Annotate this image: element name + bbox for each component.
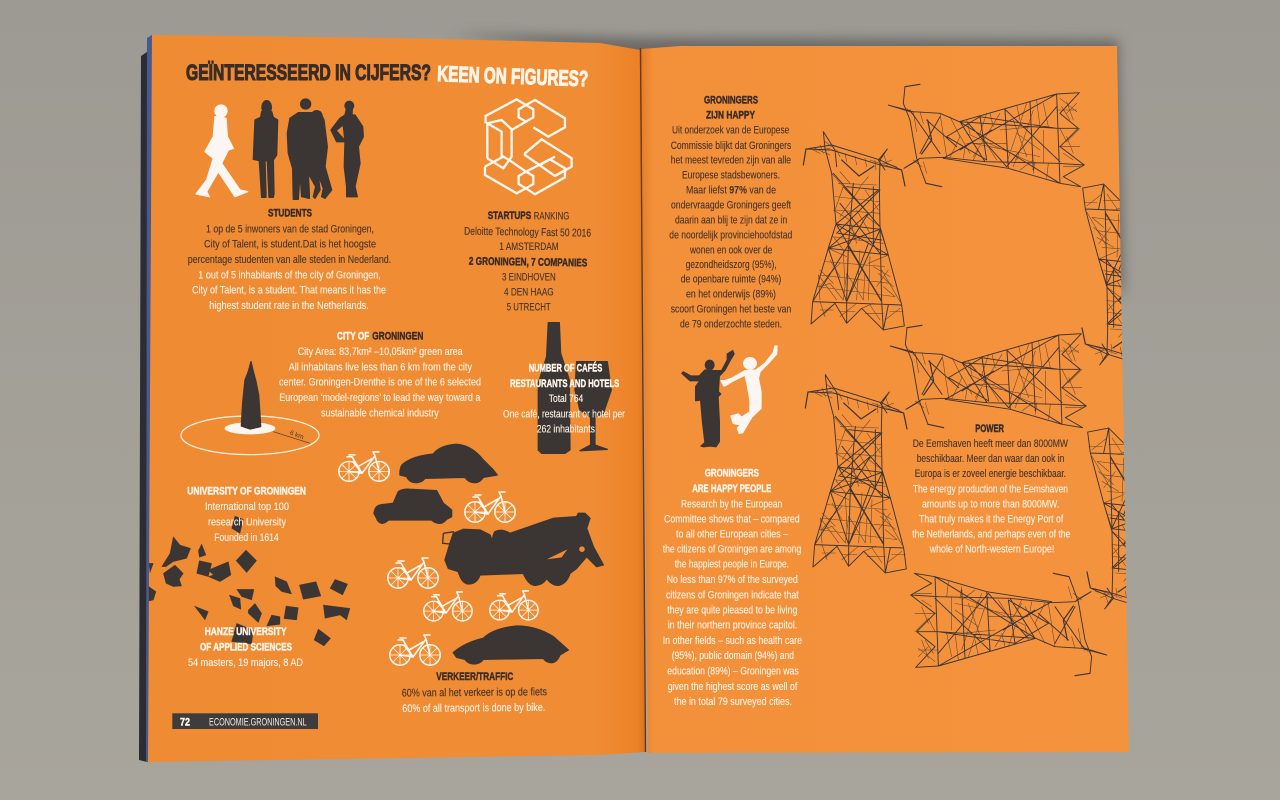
students text: City of Talent, is a student. That means it has the [192, 285, 386, 297]
white walking student [196, 105, 248, 197]
title: GEÏNTERESSEERD IN CIJFERS? [186, 60, 431, 85]
students text: 1 op de 5 inwoners van de stad Groningen, [206, 223, 374, 235]
traffic text: 60% of all transport is done by bike. [402, 702, 545, 715]
cafes text: Total 764 [549, 393, 583, 405]
icon: mini car [374, 489, 452, 523]
city of Groningen text: sustainable chemical industry [321, 407, 439, 419]
students text: percentage studenten van alle steden in Nederland. [188, 254, 391, 266]
white dancer [721, 346, 777, 433]
Groningers zijn happy text: het meest tevreden zijn van alle [671, 155, 791, 167]
power text: whole of North-western Europe! [929, 543, 1054, 555]
Groningers zijn happy text: scoort Groningen het beste van [671, 304, 791, 316]
Groningers are happy people text: citizens of Groningen indicate that [666, 589, 799, 601]
icon: dancing couple [682, 346, 777, 447]
Groningers zijn happy text: ZIJN HAPPY [706, 109, 755, 121]
Groningers are happy people text: education (89%) – Groningen was [667, 666, 799, 678]
icon: bicycle 4 [424, 592, 472, 621]
Groningers zijn happy text: gezondheidszorg (95%), [686, 259, 777, 271]
pylon inverted right edge top [1081, 184, 1122, 366]
folio bar with page number: 72 [180, 716, 190, 728]
pylon upright top [803, 132, 905, 330]
Groningers are happy people text: in their northern province capitol. [668, 620, 797, 632]
dark dancer [682, 351, 734, 447]
Groningers are happy people text: In other fields – such as health care [663, 635, 802, 647]
traffic text: VERKEER/TRAFFIC [436, 671, 513, 683]
tower silhouette [241, 362, 261, 429]
booklet shadow [450, 34, 1124, 300]
power text: beschikbaar. Meer dan waar dan ook in [917, 453, 1064, 465]
city of Groningen text: center. Groningen-Drenthe is one of the 6 selected [279, 377, 481, 389]
startups ranking text: 4 DEN HAAG [504, 287, 554, 299]
Groningers zijn happy text: wonen en ook over de [689, 244, 772, 256]
icon: startup hexagon logo [485, 99, 572, 194]
pylon horizontal bottom inverted [911, 573, 1107, 676]
radius label: 6 km [289, 430, 305, 441]
book spine page stack [139, 35, 152, 762]
city of Groningen text: European ‘model-regions’ to lead the way toward a [279, 392, 481, 404]
folio bar with page number [172, 713, 318, 729]
icon: Martini tower with 6 km circle [181, 362, 319, 455]
pylon horizontal top [888, 84, 1084, 187]
6 km ring [181, 416, 319, 455]
cafes text: RESTAURANTS AND HOTELS [510, 378, 619, 390]
students text: 1 out of 5 inhabitants of the city of Groningen, [198, 269, 381, 281]
Hanze university text: OF APPLIED SCIENCES [200, 642, 292, 654]
Hanze university text: HANZE UNIVERSITY [205, 626, 287, 638]
icon: bicycle 6 [390, 635, 440, 665]
startups ranking text: 2 GRONINGEN, 7 COMPANIES [469, 256, 587, 269]
Groningers are happy people text: Research by the European [681, 498, 782, 510]
pylon horizontal middle [890, 325, 1086, 428]
Groningers zijn happy text: daarin aan blij te zijn dat ze in [675, 214, 787, 226]
icon: scattered graduation caps [149, 516, 350, 646]
icon: wine bottle and glass [538, 323, 611, 453]
university of Groningen text [187, 485, 306, 544]
cafes text: NUMBER OF CAFÉS [529, 362, 602, 375]
city of Groningen text: GRONINGEN [372, 330, 423, 342]
traffic text: 60% van al het verkeer is op de fiets [402, 686, 547, 699]
power text [912, 423, 1070, 555]
startups ranking text: STARTUPS [488, 210, 531, 222]
Groningers zijn happy text: en het onderwijs (89%) [686, 289, 776, 301]
city centre disc [225, 422, 275, 434]
title [186, 60, 589, 91]
Groningers are happy people text: No less than 97% of the surveyed [667, 574, 798, 586]
Groningers are happy people text: the in total 79 surveyed cities. [674, 696, 792, 708]
students text: STUDENTS [268, 208, 312, 220]
left page [148, 35, 645, 762]
Groningers are happy people text: Committee shows that – compared [664, 513, 800, 525]
Groningers zijn happy text: de openbare ruimte (94%) [681, 274, 781, 286]
Groningers zijn happy text: Uit onderzoek van de Europese [672, 125, 789, 137]
Groningers zijn happy text: GRONINGERS [704, 94, 758, 106]
icon: student silhouettes [196, 99, 363, 199]
students text: highest student rate in the Netherlands. [209, 300, 369, 312]
folio bar with page number: ECONOMIE.GRONINGEN.NL [209, 716, 307, 728]
city of Groningen text [279, 330, 481, 419]
traffic text [402, 671, 547, 715]
Groningers are happy people text: ARE HAPPY PEOPLE [692, 483, 771, 495]
power text: the Netherlands, and perhaps even of the [912, 528, 1070, 540]
title: KEEN ON FIGURES? [437, 61, 589, 91]
dark student standing [331, 101, 363, 197]
pylon upright bottom [805, 375, 907, 573]
icon: electricity pylons pattern [802, 84, 1126, 676]
Groningers are happy people text: GRONINGERS [705, 468, 759, 480]
Hanze university text [188, 626, 303, 669]
power text: The energy production of the Eemshaven [913, 483, 1068, 495]
pylon inverted right edge bottom [1086, 428, 1126, 610]
city of Groningen text: All inhabitans live less than 6 km from the city [289, 361, 472, 373]
power text: Europa is er zoveel energie beschikbaar. [915, 468, 1066, 480]
power text: POWER [975, 423, 1004, 435]
Hanze university text: 54 masters, 19 majors, 8 AD [188, 657, 303, 669]
Groningers zijn happy text: ondervraagde Groningers geeft [671, 199, 791, 211]
Groningers are happy people text: they are quite pleased to be living [667, 604, 797, 616]
icon: bicycle 5 [490, 591, 538, 620]
Groningers zijn happy text [669, 94, 792, 330]
dark student couple [287, 99, 332, 199]
Groningers are happy people text [663, 468, 802, 708]
Groningers are happy people text: to all other European cities – [676, 528, 789, 540]
university of Groningen text: International top 100 [205, 501, 289, 513]
icon: bicycle 2 [465, 492, 515, 522]
icon: porsche car [453, 626, 568, 664]
icon: cement truck [443, 513, 603, 585]
arm gap [337, 126, 344, 138]
Groningers are happy people text: (95%), public domain (94%) and [672, 650, 794, 662]
city of Groningen text: CITY OF [337, 330, 369, 342]
Groningers are happy people text: given the highest score as well of [668, 681, 798, 693]
startups ranking text [464, 210, 591, 314]
cafes text [503, 362, 625, 435]
radius line [273, 432, 310, 443]
students text: City of Talent, is student.Dat is het hoogste [204, 239, 376, 251]
power text: That truly makes it the Energy Port of [919, 513, 1064, 525]
Groningers zijn happy text: Commissie blijkt dat Groningers [671, 140, 792, 152]
cafes text: One café, restaurant or hotel per [503, 408, 625, 420]
university of Groningen text: Founded in 1614 [214, 532, 279, 544]
Groningers are happy people text: the happiest people in Europe. [675, 559, 789, 571]
city of Groningen text: City Area: 83,7km² –10,05km² green area [298, 346, 463, 358]
Groningers zijn happy text: de noordelijk provinciehoofdstad [669, 229, 792, 241]
icon: bicycle 1 [339, 452, 389, 481]
university of Groningen text: UNIVERSITY OF GRONINGEN [187, 485, 306, 497]
dark student figure [253, 101, 278, 197]
Groningers zijn happy text: de 79 onderzochte steden. [680, 318, 782, 330]
Groningers zijn happy text: Maar liefst 97% van de [686, 184, 776, 196]
power text: De Eemshaven heeft meer dan 8000MW [913, 438, 1068, 450]
startups ranking text: 5 UTRECHT [507, 302, 551, 314]
right page [641, 46, 1129, 753]
students text [188, 208, 391, 312]
icon: bicycle 3 [388, 558, 438, 588]
power text: amounts up to more than 8000MW. [922, 498, 1059, 510]
Groningers zijn happy text: Europese stadsbewoners. [682, 170, 780, 182]
startups ranking text: RANKING [534, 211, 569, 223]
startups ranking text: 3 EINDHOVEN [502, 272, 556, 284]
Groningers are happy people text: the citizens of Groningen are among [663, 544, 801, 556]
gutter line between pages [640, 48, 646, 752]
university of Groningen text: research University [208, 517, 286, 529]
cafes text: 262 inhabitants [537, 423, 595, 435]
icon: beetle car [400, 444, 497, 483]
startups ranking text: 1 AMSTERDAM [499, 241, 559, 253]
startups ranking text: Deloitte Technology Fast 50 2016 [464, 226, 591, 240]
